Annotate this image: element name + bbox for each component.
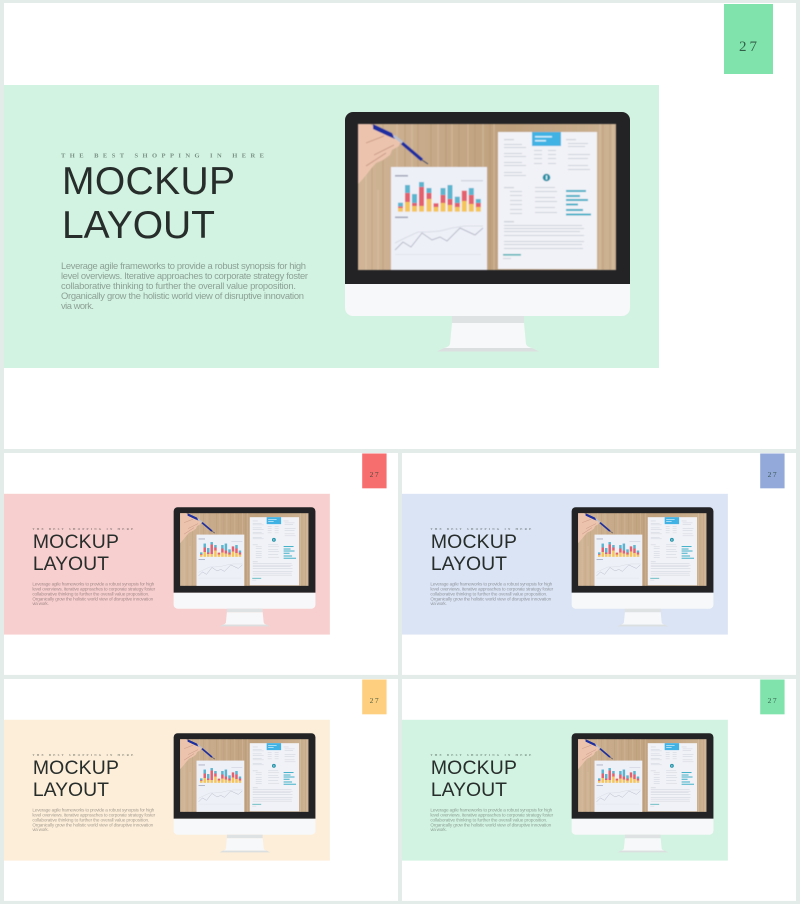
body text: via work. xyxy=(430,827,447,832)
body text: Leverage agile frameworks to provide a robust synopsis for high xyxy=(32,807,155,812)
slide: pink xyxy=(4,453,398,675)
heading: mockup: MOCKUP xyxy=(33,757,119,779)
panel: pink banner xyxy=(4,494,330,635)
body text: Organically grow the holistic world view of disruptive innovation xyxy=(430,822,552,827)
slide: small green xyxy=(402,679,796,901)
kicker: THE BEST SHOPPING IN HERE xyxy=(430,753,531,757)
body text: level overviews. Iterative approaches to corporate strategy foster xyxy=(32,586,156,591)
page number: 27 xyxy=(370,696,379,705)
body text: collaborative thinking to further the overall value proposition. xyxy=(61,280,296,291)
heading: layout: LAYOUT xyxy=(431,553,507,575)
page number: 27 xyxy=(370,470,379,479)
heading: mockup: MOCKUP xyxy=(62,160,235,203)
monitor mockup xyxy=(345,112,630,352)
panel: peach banner xyxy=(4,720,330,861)
body text: Leverage agile frameworks to provide a robust synopsis for high xyxy=(430,807,553,812)
body text: Leverage agile frameworks to provide a robust synopsis for high xyxy=(61,260,306,271)
body text: Organically grow the holistic world view of disruptive innovation xyxy=(32,822,154,827)
body text: level overviews. Iterative approaches to corporate strategy foster xyxy=(32,812,156,817)
panel: green banner xyxy=(4,85,659,368)
body text: Organically grow the holistic world view of disruptive innovation xyxy=(430,596,552,601)
kicker: THE BEST SHOPPING IN HERE xyxy=(32,753,133,757)
heading: mockup: MOCKUP xyxy=(431,531,517,553)
body text: level overviews. Iterative approaches to corporate strategy foster xyxy=(61,270,308,281)
slide: large green xyxy=(4,3,796,449)
heading: layout: LAYOUT xyxy=(33,553,109,575)
page number: 27 xyxy=(739,39,758,55)
heading: mockup: MOCKUP xyxy=(33,531,119,553)
heading: layout: LAYOUT xyxy=(431,779,507,801)
panel: blue banner xyxy=(402,494,728,635)
slide: blue xyxy=(402,453,796,675)
page tab xyxy=(760,453,785,488)
body text: Organically grow the holistic world view of disruptive innovation xyxy=(61,290,304,301)
monitor mockup xyxy=(174,733,315,852)
body text xyxy=(32,581,156,606)
body text: collaborative thinking to further the overall value proposition. xyxy=(32,817,149,822)
body text xyxy=(32,807,156,832)
body text xyxy=(61,260,308,311)
body text: collaborative thinking to further the overall value proposition. xyxy=(430,817,547,822)
heading: layout: LAYOUT xyxy=(33,779,109,801)
body text: collaborative thinking to further the overall value proposition. xyxy=(32,591,149,596)
heading: layout: LAYOUT xyxy=(62,204,215,247)
body text: Leverage agile frameworks to provide a robust synopsis for high xyxy=(430,581,553,586)
kicker: THE BEST SHOPPING IN HERE xyxy=(32,527,133,531)
kicker: THE BEST SHOPPING IN HERE xyxy=(61,152,264,160)
body text: via work. xyxy=(430,601,447,606)
heading: mockup: MOCKUP xyxy=(431,757,517,779)
body text xyxy=(430,581,554,606)
body text: Leverage agile frameworks to provide a robust synopsis for high xyxy=(32,581,155,586)
page tab xyxy=(760,679,785,714)
monitor mockup xyxy=(174,507,315,626)
panel: green banner xyxy=(402,720,728,861)
body text: level overviews. Iterative approaches to corporate strategy foster xyxy=(430,586,554,591)
body text: Organically grow the holistic world view of disruptive innovation xyxy=(32,596,154,601)
page number: 27 xyxy=(768,696,777,705)
monitor mockup xyxy=(572,733,713,852)
page number: 27 xyxy=(768,470,777,479)
page tab xyxy=(362,679,387,714)
body text: level overviews. Iterative approaches to corporate strategy foster xyxy=(430,812,554,817)
body text: collaborative thinking to further the overall value proposition. xyxy=(430,591,547,596)
page tab xyxy=(362,453,387,488)
body text xyxy=(430,807,554,832)
body text: via work. xyxy=(61,300,94,311)
body text: via work. xyxy=(32,601,49,606)
kicker: THE BEST SHOPPING IN HERE xyxy=(430,527,531,531)
slide: peach xyxy=(4,679,398,901)
page tab xyxy=(724,4,773,74)
body text: via work. xyxy=(32,827,49,832)
monitor mockup xyxy=(572,507,713,626)
